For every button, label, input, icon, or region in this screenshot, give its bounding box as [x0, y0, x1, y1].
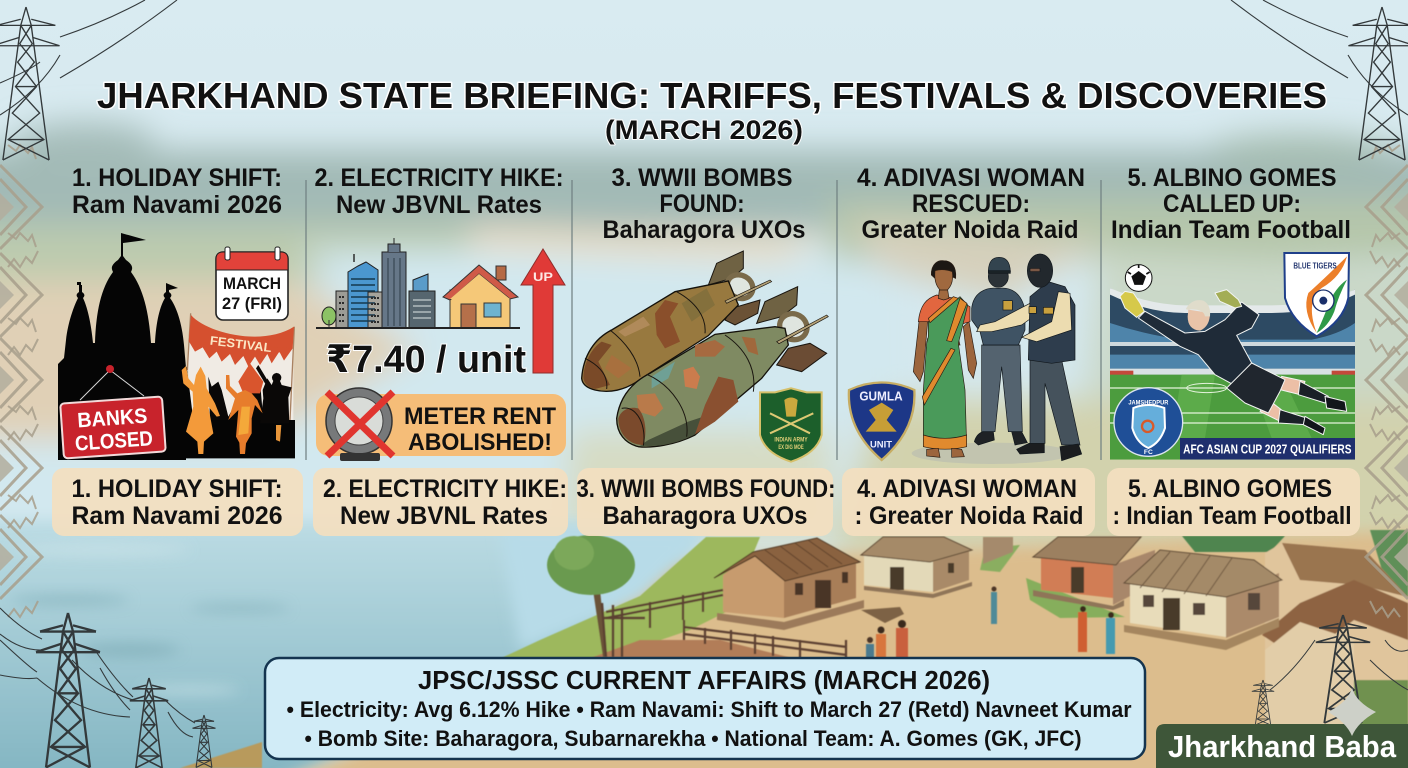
ground shadow — [912, 443, 1072, 464]
woman in green saree — [913, 261, 977, 457]
ground line — [316, 327, 520, 329]
bomb 2 — [617, 287, 828, 447]
label box 5: 5. ALBINO GOMES — [1128, 475, 1332, 503]
label box 2 — [313, 468, 568, 536]
hut 3 — [1033, 537, 1155, 610]
label box 3 — [576, 468, 836, 536]
hut 4 — [1124, 550, 1282, 650]
label box 3: 3. WWII BOMBS FOUND: — [576, 475, 836, 503]
officer 2 — [977, 254, 1082, 461]
calendar: March 27: 27 (FRI) — [222, 294, 282, 313]
heading: column 4: 4. ADIVASI WOMAN — [857, 164, 1085, 192]
panel 3: WWII bombs illustration — [582, 251, 828, 462]
calendar: March 27: MARCH — [223, 274, 281, 293]
grass patches and trees — [1026, 578, 1125, 618]
current affairs summary box: • Bomb Site: Baharagora, Subarnarekha • National Team: A. Gomes (GK, JFC) — [304, 726, 1082, 751]
temple silhouette — [58, 233, 186, 460]
up arrow — [521, 249, 565, 373]
heading: column 5: 5. ALBINO GOMES — [1128, 164, 1336, 192]
title — [97, 75, 1327, 145]
grass bank — [480, 537, 760, 668]
banks closed sign: BANKS — [77, 405, 148, 432]
brown bank by the water — [180, 742, 262, 768]
right tribal pattern border — [1366, 145, 1408, 617]
column dividers — [306, 180, 1101, 460]
current affairs summary box — [265, 658, 1145, 759]
current affairs summary box: • Electricity: Avg 6.12% Hike • Ram Navami: Shift to March 27 (Retd) Navneet Kumar — [286, 697, 1132, 722]
panel 4: rescue illustration — [849, 254, 1082, 464]
panel 2: electricity hike illustration — [316, 238, 566, 461]
label box 2: New JBVNL Rates — [340, 502, 548, 530]
festival crowd and banner: FESTIVAL — [209, 334, 273, 355]
Blue Tigers badge: BLUE TIGERS — [1293, 261, 1337, 271]
hut 1 — [714, 538, 864, 630]
left tribal pattern border — [0, 145, 42, 617]
label box 1 — [52, 468, 303, 536]
city skyline — [322, 238, 435, 328]
meter rent pill: METER RENT — [404, 403, 556, 430]
heading: column 2: New JBVNL Rates — [336, 191, 542, 219]
rock pile — [861, 607, 904, 623]
label box 1: 1. HOLIDAY SHIFT: — [72, 475, 282, 503]
strip label: AFC ASIAN CUP 2027 QUALIFIERS — [1183, 443, 1351, 457]
label box 4 — [842, 468, 1095, 536]
heading: column 2: 2. ELECTRICITY HIKE: — [314, 164, 564, 192]
JFC badge: FC — [1144, 449, 1153, 456]
heading: column 2 — [314, 164, 564, 219]
rate label: ₹7.40 / unit — [326, 339, 526, 381]
house — [443, 265, 518, 328]
up arrow: UP — [533, 270, 553, 284]
label box 3: Baharagora UXOs — [602, 502, 808, 530]
fences — [606, 590, 847, 660]
label box 4: : Greater Noida Raid — [854, 502, 1084, 530]
sparkle icon — [1328, 688, 1376, 736]
Blue Tigers badge — [1284, 253, 1349, 336]
title: JHARKHAND STATE BRIEFING: TARIFFS, FESTIVALS & DISCOVERIES — [97, 75, 1327, 116]
hut 2 — [861, 537, 1013, 598]
panel 1: temple illustration — [58, 233, 295, 460]
heading: column 4 — [857, 164, 1085, 244]
bomb 1 — [582, 251, 772, 391]
Gumla unit badge: GUMLA — [859, 390, 903, 404]
current affairs summary box: JPSC/JSSC CURRENT AFFAIRS (MARCH 2026) — [418, 665, 990, 695]
stadium — [1110, 288, 1355, 460]
brand badge: Jharkhand Baba: Jharkhand Baba — [1168, 729, 1397, 764]
panel 5: goalkeeper illustration — [1110, 253, 1355, 460]
festival crowd and banner — [180, 313, 295, 458]
heading: column 3: FOUND: — [660, 190, 744, 218]
village scene — [180, 530, 1408, 768]
heading: column 4: Greater Noida Raid — [862, 216, 1078, 244]
officer 1 — [972, 257, 1027, 445]
heading: column 1: Ram Navami 2026 — [72, 191, 282, 219]
Gumla unit badge — [849, 382, 914, 460]
heading: column 3: Baharagora UXOs — [602, 216, 806, 244]
label box 5: : Indian Team Football — [1112, 502, 1352, 530]
title: (MARCH 2026) — [605, 115, 803, 145]
villagers — [866, 586, 1115, 658]
Gumla unit badge: UNIT — [870, 439, 892, 449]
heading: column 3: 3. WWII BOMBS — [612, 164, 792, 192]
meter rent pill: ABOLISHED! — [408, 429, 552, 456]
army badge: EX DIG MOE — [778, 444, 804, 451]
calendar: March 27 — [216, 247, 288, 320]
JFC badge: JAMSHEDPUR — [1128, 400, 1168, 407]
heading: column 5: CALLED UP: — [1163, 190, 1301, 218]
heading: column 5: Indian Team Football — [1111, 216, 1351, 244]
heading: column 1 — [72, 164, 282, 219]
army badge — [760, 388, 822, 462]
heading: column 1: 1. HOLIDAY SHIFT: — [72, 164, 282, 192]
heading: column 5 — [1111, 164, 1351, 244]
label box 1: Ram Navami 2026 — [72, 502, 282, 530]
meter rent pill — [316, 388, 566, 461]
label box 2: 2. ELECTRICITY HIKE: — [323, 475, 567, 503]
banks closed sign: CLOSED — [74, 427, 154, 456]
football — [1125, 265, 1152, 291]
tree — [547, 535, 635, 657]
label box 4: 4. ADIVASI WOMAN — [857, 475, 1077, 503]
gate posts — [602, 603, 645, 657]
brand badge: Jharkhand Baba — [1156, 688, 1408, 768]
banks closed sign — [60, 365, 166, 458]
heading: column 3 — [602, 164, 806, 244]
heading: column 4: RESCUED: — [912, 190, 1030, 218]
JFC badge — [1114, 388, 1183, 456]
label box 5 — [1107, 468, 1360, 536]
goalkeeper — [1120, 290, 1347, 435]
hut 5 — [1262, 543, 1408, 768]
army badge: INDIAN ARMY — [774, 437, 808, 444]
